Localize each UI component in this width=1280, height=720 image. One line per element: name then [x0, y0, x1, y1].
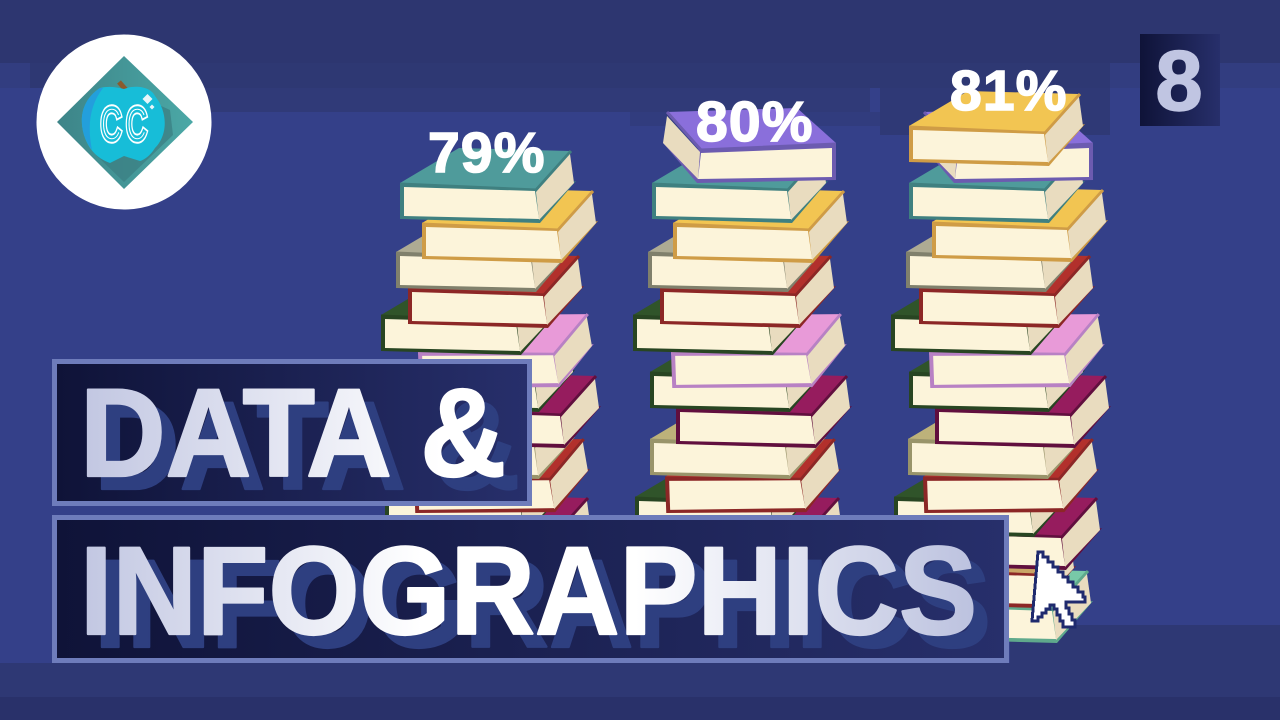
book: dark green: [381, 280, 557, 355]
book: dark green middle: [399, 337, 575, 412]
apple stem: [119, 82, 126, 90]
logo: Crash Course apple badge: [36, 34, 212, 210]
title panel: DATA &: [54, 362, 530, 516]
title shadow: DATA &: [94, 377, 520, 516]
episode number badge: [1140, 34, 1220, 129]
book: pink: [417, 311, 595, 392]
book: red: [660, 253, 836, 328]
CC letters: C: [101, 99, 121, 151]
book: tan: [900, 533, 1076, 608]
book: magenta: [425, 373, 601, 448]
title panel: INFOGRAPHICS: [54, 518, 1006, 674]
book: dark green middle: [650, 337, 826, 412]
book: magenta: [676, 373, 852, 448]
book: teal: [652, 148, 828, 223]
book: red lower: [922, 436, 1100, 517]
title text: INFOGRAPHICS: [80, 522, 977, 661]
episode number badge: 8: [1155, 34, 1203, 129]
book: yellow: [673, 188, 849, 263]
book: dark green middle: [909, 337, 1085, 412]
book: dark green lower: [385, 462, 561, 537]
book: gray: [648, 217, 824, 292]
book: pink: [928, 311, 1106, 392]
book: red lower: [413, 436, 591, 517]
value label: 81%: 81%: [950, 59, 1068, 123]
apple highlight: [82, 88, 103, 150]
apple body: [82, 87, 165, 163]
book: magenta: [935, 373, 1111, 448]
book: magenta lower: [926, 495, 1102, 570]
book stack: 81%: [891, 91, 1111, 643]
book: yellow: [422, 188, 598, 263]
book: dark green lower: [635, 462, 811, 537]
icon: mouse cursor: [1032, 552, 1085, 627]
book: red: [919, 253, 1095, 328]
book stack: 80%: [633, 108, 852, 570]
book: magenta lower: [668, 495, 844, 570]
CC letters: C: [126, 99, 147, 151]
book: khaki: [650, 404, 826, 479]
logo shadow: [96, 89, 173, 182]
book: purple: [663, 108, 836, 183]
book: tan: [391, 533, 567, 608]
book: light green: [408, 568, 584, 643]
book: dark green: [633, 280, 809, 355]
book: teal: [400, 148, 576, 223]
book: khaki: [399, 404, 575, 479]
CC letters: C: [126, 99, 147, 151]
book: khaki: [908, 404, 1084, 479]
book: dark green lower: [894, 462, 1070, 537]
sparkles: [142, 94, 154, 110]
title shadow: INFOGRAPHICS: [94, 535, 991, 674]
book: red lower: [664, 436, 842, 517]
book: magenta lower: [417, 495, 593, 570]
book: dark green: [891, 280, 1067, 355]
book: yellow: [932, 187, 1108, 262]
book: light green: [917, 568, 1093, 643]
book stack: 79%: [381, 148, 601, 643]
CC letters: C: [101, 99, 121, 151]
CC letters: [101, 99, 147, 151]
title text: DATA &: [80, 364, 506, 503]
book: yellow top: [909, 91, 1085, 166]
value label: 79%: 79%: [428, 121, 546, 185]
logo circle: [36, 34, 212, 210]
value label: 80%: 80%: [696, 90, 814, 154]
book: purple: [920, 108, 1093, 183]
book: teal: [909, 148, 1085, 223]
book: gray: [906, 217, 1082, 292]
book: pink: [670, 311, 848, 392]
book: red: [408, 253, 584, 328]
logo diamond: [57, 56, 193, 189]
book: gray: [396, 217, 572, 292]
